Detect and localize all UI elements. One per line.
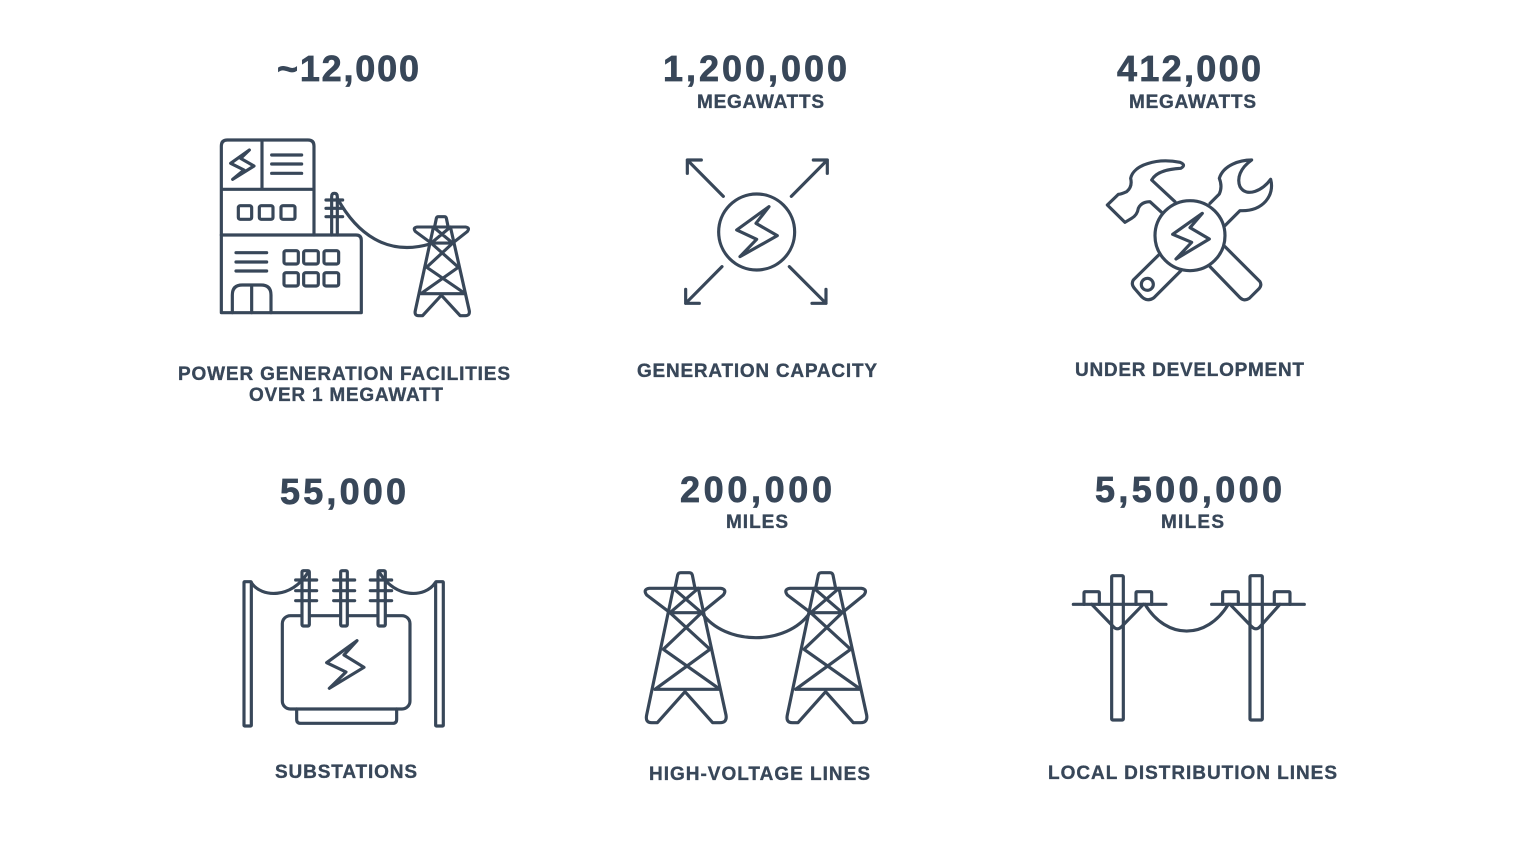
number: ~12,000: ~12,000 [277,48,419,89]
label: over 1 megawatt: OVER 1 MEGAWATT [249,385,443,406]
label: substations: SUBSTATIONS [275,762,417,783]
label: high-voltage lines: HIGH-VOLTAGE LINES [649,764,870,785]
stat: under development [1075,48,1304,381]
label: power generation facilities: POWER GENERATION FACILITIES [178,364,510,385]
icon: hammer and wrench [1107,160,1272,300]
stat: local distribution lines [1048,469,1337,784]
label: generation capacity: GENERATION CAPACITY [637,361,877,382]
stat: generation capacity [637,48,877,382]
icon: utility poles [1073,576,1304,720]
icon: power plant and pylon [221,140,469,316]
number: 1,200,000: 1,200,000 [663,48,847,89]
stat: power generation facilities [178,48,510,406]
icon: expanding arrows around bolt [686,160,827,303]
unit: megawatts: MEGAWATTS [697,92,824,113]
stat: high-voltage lines [645,469,870,785]
icon: high-voltage pylons [645,573,867,723]
unit: miles: MILES [1161,512,1224,533]
number: 412,000: 412,000 [1117,48,1261,89]
label: under development: UNDER DEVELOPMENT [1075,360,1304,381]
unit: miles: MILES [726,512,788,533]
number: 55,000: 55,000 [280,471,406,512]
unit: megawatts: MEGAWATTS [1129,92,1256,113]
label: local distribution lines: LOCAL DISTRIBUTION LINES [1048,763,1337,784]
icon: substation transformer [244,571,443,726]
number: 200,000: 200,000 [680,469,832,510]
stat: substations [244,471,443,783]
number: 5,500,000: 5,500,000 [1095,469,1282,510]
